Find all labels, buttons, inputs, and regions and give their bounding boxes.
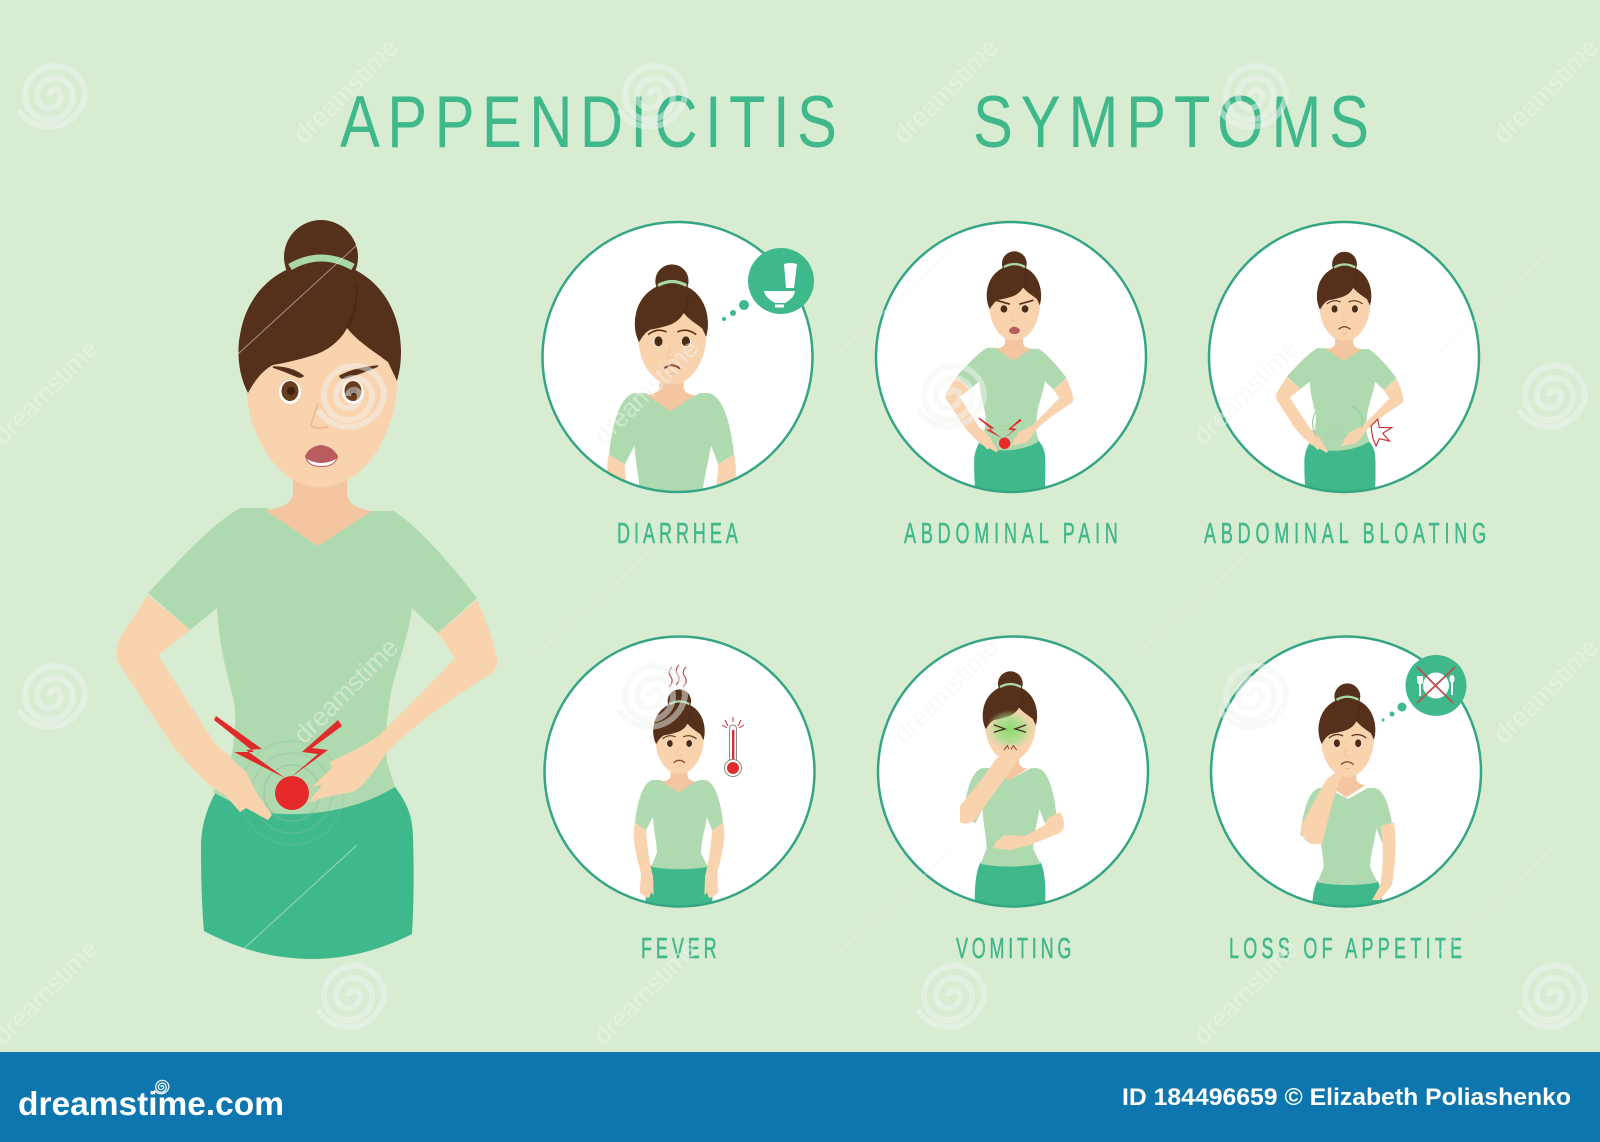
main figure: woman with abdominal pain [116, 220, 497, 959]
footer credit: ID 184496659 © Elizabeth Poliashenko [1122, 1084, 1571, 1111]
panel: fever [544, 636, 814, 965]
label: vomiting: VOMITING [956, 933, 1071, 965]
figure: diarrhea [607, 264, 736, 491]
label: fever: FEVER [641, 933, 717, 965]
panel: loss of appetite [1211, 636, 1481, 965]
watermark overlay: dreamstime [1187, 333, 1304, 450]
figure: loss of appetite [1300, 683, 1396, 929]
figure: fever [634, 689, 724, 910]
panel: abdominal pain [876, 222, 1146, 550]
panel: diarrhea [542, 222, 814, 577]
icon: heat waves [669, 665, 686, 687]
label: loss of appetite: LOSS OF APPETITE [1229, 933, 1462, 965]
watermark overlay: dreamstime [587, 933, 704, 1050]
footer logo: dreamstime.com [18, 1085, 284, 1122]
watermark overlay: dreamstime [287, 32, 404, 149]
watermark overlay: dreamstime [887, 32, 1004, 149]
figure: abdominal bloating [1276, 252, 1404, 499]
title [340, 82, 1369, 163]
panel: abdominal bloating [1204, 222, 1486, 550]
label: abdominal pain: ABDOMINAL PAIN [904, 518, 1118, 550]
label: abdominal bloating: ABDOMINAL BLOATING [1204, 518, 1486, 550]
panel: vomiting [878, 636, 1148, 965]
label: diarrhea: DIARRHEA [617, 518, 739, 550]
title: SYMPTOMS [973, 82, 1369, 163]
icon: pain spark [1371, 419, 1392, 446]
title: APPENDICITIS [340, 82, 837, 163]
watermark overlay: dreamstime [1187, 933, 1304, 1050]
watermark overlay: dreamstime [587, 333, 704, 450]
figure: vomiting [960, 671, 1064, 911]
figure: abdominal pain [946, 251, 1073, 499]
watermark overlay: dreamstime [287, 632, 404, 749]
icon: thermometer [722, 717, 744, 776]
icon: toilet thought bubble [722, 248, 814, 321]
main figure head [238, 220, 401, 546]
main figure pain marker [214, 716, 342, 810]
footer bar [0, 1052, 1600, 1142]
watermark overlay: dreamstime [887, 632, 1004, 749]
icon: no food thought bubble [1382, 655, 1466, 722]
